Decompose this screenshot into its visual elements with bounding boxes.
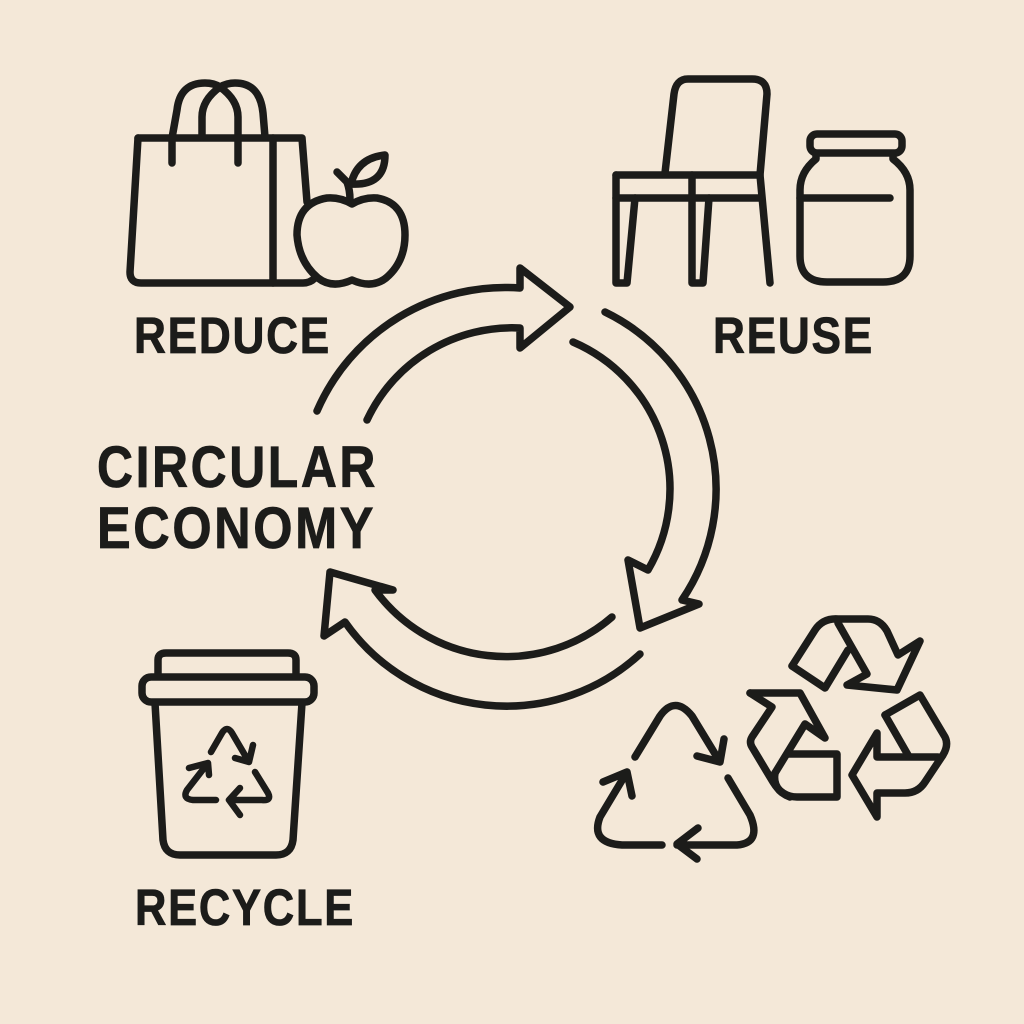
arrow: recycle to reduce (324, 572, 640, 706)
icon: folded recycling symbol (750, 619, 947, 817)
icon: chair (616, 79, 770, 283)
icon: shopping bag (130, 83, 315, 283)
icon: apple (297, 155, 405, 284)
title: circular economy: CIRCULAR (97, 435, 378, 500)
icon: small recycling symbol (185, 729, 269, 815)
arrow: reuse to recycle (573, 312, 716, 628)
title: circular economy (97, 435, 378, 561)
arrow: reduce to reuse (317, 268, 570, 420)
icon: jar (800, 134, 910, 282)
heading: reduce: REDUCE (134, 307, 331, 364)
heading: recycle: RECYCLE (135, 879, 355, 936)
icon: recycling bin (142, 653, 314, 855)
title: circular economy: ECONOMY (97, 496, 376, 561)
heading: reuse: REUSE (713, 307, 874, 364)
icon: large outline recycling triangle (598, 706, 754, 859)
